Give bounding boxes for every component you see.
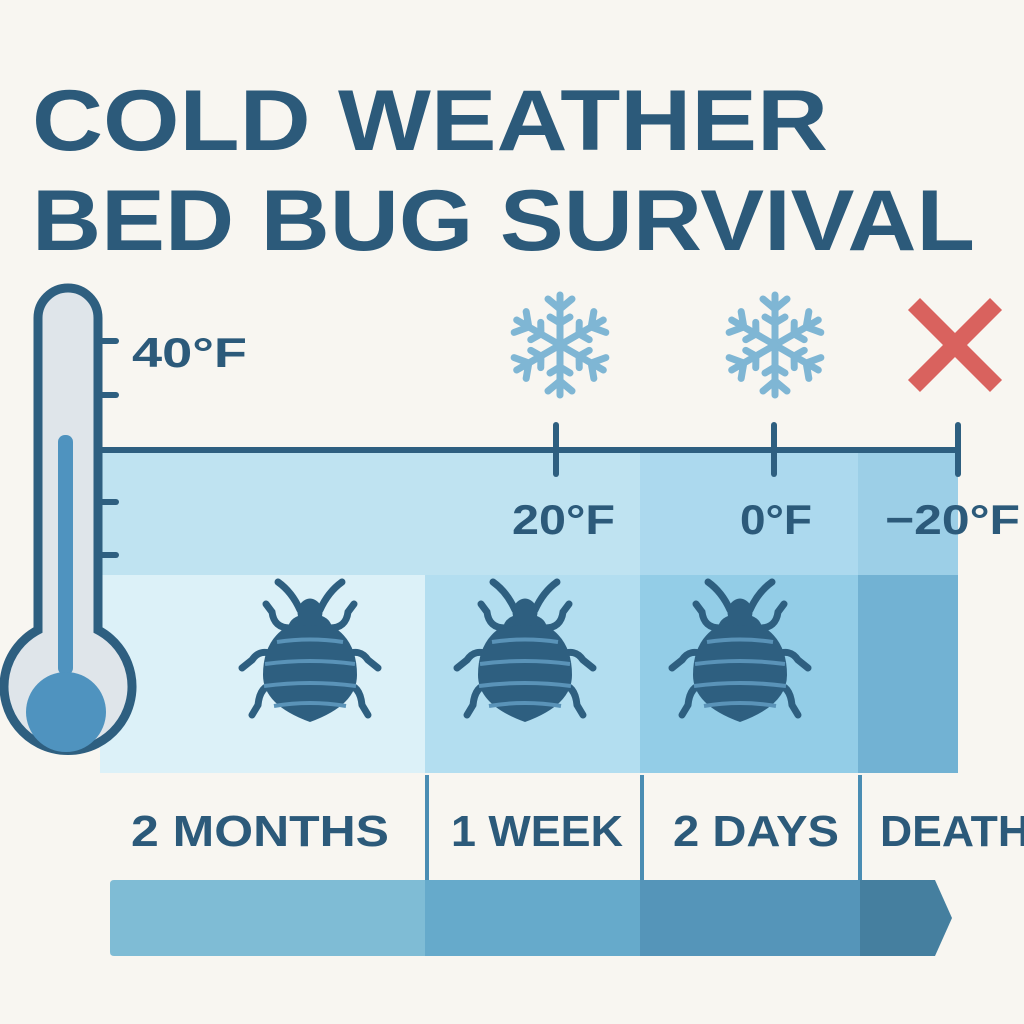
label: 20F: 20°F (512, 496, 615, 543)
title: BED BUG SURVIVAL (32, 173, 975, 269)
duration labels: 1 WEEK (451, 807, 623, 856)
icon: bug 1 week (457, 582, 593, 722)
label: 40F: 40°F (132, 329, 247, 376)
icon: snowflake 20F (511, 295, 609, 395)
icon: bug 2 days (672, 582, 808, 722)
duration labels: DEATH (880, 807, 1024, 856)
icon: bug 2 months (242, 582, 378, 722)
label: -20F: −20°F (885, 496, 1020, 543)
label: 0F: 0°F (740, 496, 812, 543)
icon: red X (920, 310, 990, 380)
title: COLD WEATHER (32, 73, 828, 169)
duration labels: 2 DAYS (673, 807, 839, 856)
panel: temperature bands (100, 453, 958, 773)
temperature axis (100, 425, 958, 474)
duration labels: 2 MONTHS (131, 807, 389, 856)
bottom progress arrow (110, 880, 952, 956)
icon: snowflake 0F (726, 295, 824, 395)
dividers (427, 775, 860, 880)
duration labels (131, 807, 1024, 856)
thermometer (4, 288, 132, 752)
title (32, 73, 975, 269)
